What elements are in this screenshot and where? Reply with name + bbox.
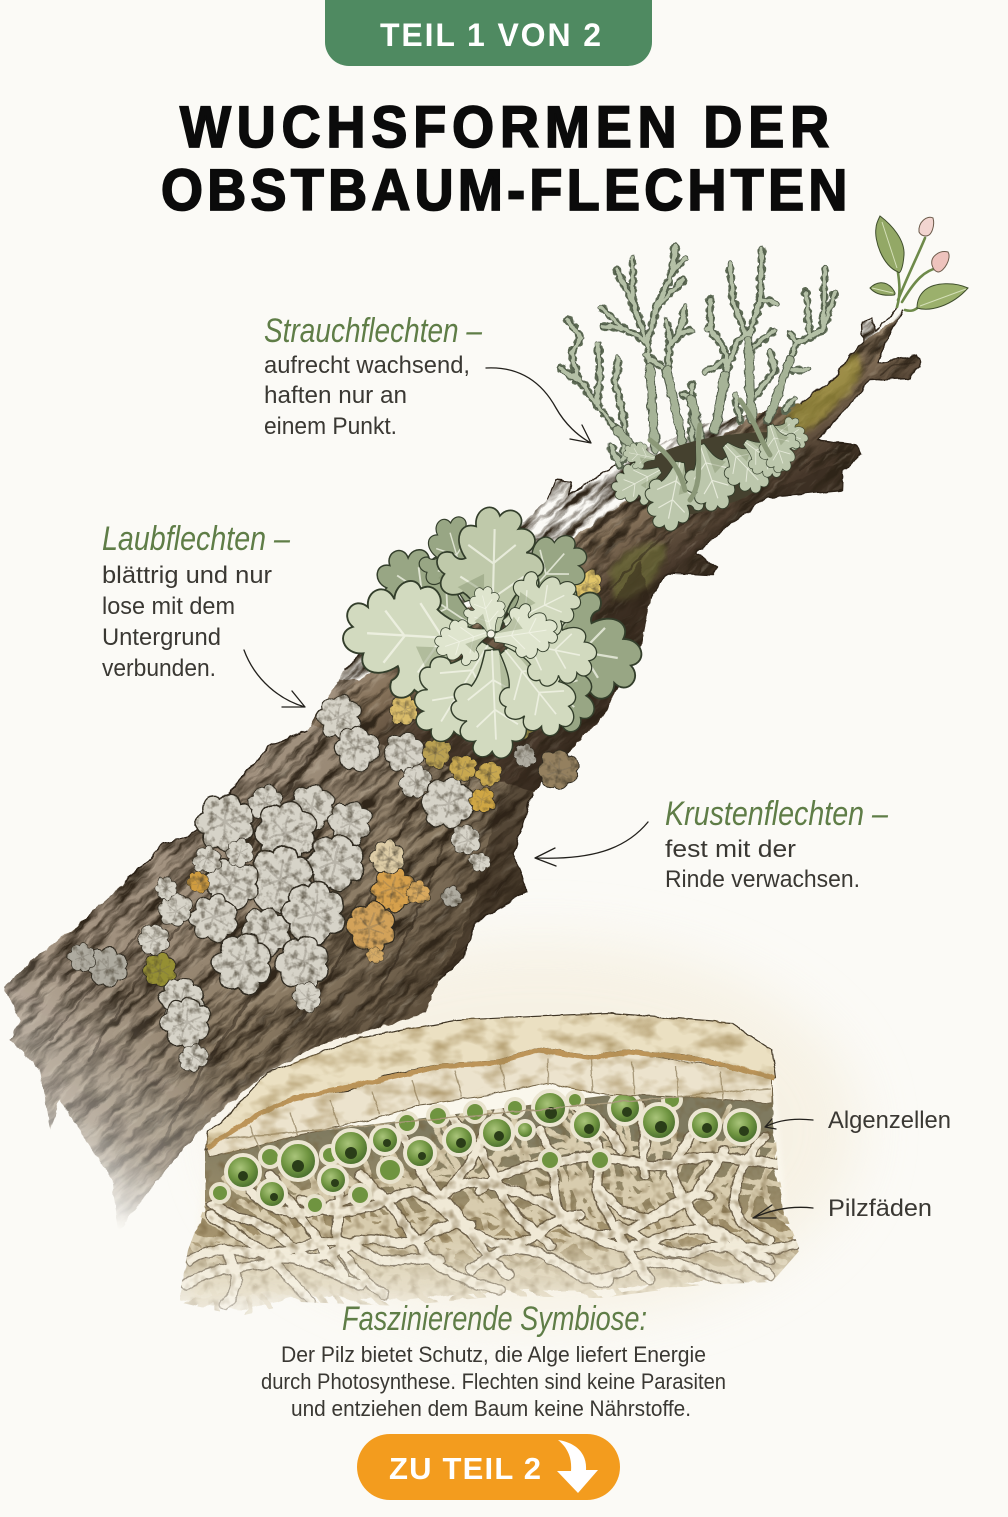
annotation: Laubflechten: lose mit dem <box>102 593 235 620</box>
annotation: Strauchflechten: aufrecht wachsend, <box>264 352 470 379</box>
lichen cross-section <box>180 1012 800 1315</box>
header pill: Teil 1 von 2: TEIL 1 VON 2 <box>380 17 601 53</box>
leaf veins <box>872 222 966 306</box>
annotation: Krustenflechten: Rinde verwachsen. <box>665 866 860 893</box>
annotation: Strauchflechten: haften nur an <box>264 382 407 409</box>
wash behind section <box>220 940 860 1320</box>
icon: curved down arrow <box>557 1440 598 1493</box>
title <box>161 94 847 222</box>
arrow to Algenzellen <box>765 1119 813 1129</box>
annotation: Strauchflechten: Strauchflechten – <box>264 312 483 350</box>
illustration: tree branch with lichens <box>4 215 969 1224</box>
stems <box>897 238 938 311</box>
label: Algenzellen: Algenzellen <box>828 1107 951 1134</box>
annotation: Krustenflechten: Krustenflechten – <box>665 795 889 833</box>
fungal mesh layer <box>180 1087 800 1315</box>
symbiosis text block: durch Photosynthese. Flechten sind keine Parasiten <box>261 1369 726 1394</box>
annotation: Laubflechten <box>102 520 291 682</box>
arrow to Laubflechten <box>244 650 305 707</box>
bud <box>919 217 934 236</box>
annotation: Laubflechten: verbunden. <box>102 655 216 682</box>
section halo <box>190 1013 790 1300</box>
symbiosis text block: und entziehen dem Baum keine Nährstoffe. <box>291 1396 691 1421</box>
fruticose base lobes <box>604 411 813 536</box>
crustose lichen rosettes <box>67 569 601 1071</box>
button: Zu Teil 2: ZU TEIL 2 <box>389 1451 541 1486</box>
annotation: Krustenflechten <box>665 795 889 893</box>
annotation: Strauchflechten <box>264 312 483 440</box>
foliose lichen rosette <box>341 507 649 763</box>
cell layer <box>205 1052 772 1157</box>
twig with leaves and buds <box>870 216 968 311</box>
header pill: Teil 1 von 2 <box>325 0 652 66</box>
annotation: Laubflechten: Untergrund <box>102 624 221 651</box>
annotation: Strauchflechten: einem Punkt. <box>264 413 397 440</box>
arrow to Strauchflechten <box>486 368 591 443</box>
algae cells <box>211 1091 759 1214</box>
annotation: Laubflechten: blättrig und nur <box>102 562 272 589</box>
title: WUCHSFORMEN DER <box>180 94 829 159</box>
cortex and cell layers <box>205 1013 776 1157</box>
symbiosis text block <box>261 1300 726 1421</box>
fruticose lichen <box>560 245 835 536</box>
orange and yellow crusts <box>143 569 601 987</box>
branch outline <box>125 307 920 980</box>
arrow to Pilzfäden <box>753 1205 813 1218</box>
moss patches on branch <box>610 352 861 600</box>
cortex top layer <box>205 1013 776 1150</box>
annotation: Krustenflechten: fest mit der <box>665 836 796 863</box>
button: Zu Teil 2 <box>357 1434 620 1500</box>
bud <box>932 252 949 272</box>
leaf <box>917 284 968 309</box>
leaf <box>870 283 895 295</box>
label: Pilzfäden: Pilzfäden <box>828 1195 932 1222</box>
title: OBSTBAUM-FLECHTEN <box>161 157 847 222</box>
trunk and branch <box>4 308 922 1224</box>
symbiosis text block: Der Pilz bietet Schutz, die Alge liefert Energie <box>281 1342 706 1367</box>
arrow to Krustenflechten <box>535 822 648 866</box>
annotation: Laubflechten: Laubflechten – <box>102 520 291 558</box>
leaf <box>876 216 904 273</box>
orange band <box>207 1050 775 1148</box>
symbiosis text block: Faszinierende Symbiose: <box>342 1300 647 1338</box>
